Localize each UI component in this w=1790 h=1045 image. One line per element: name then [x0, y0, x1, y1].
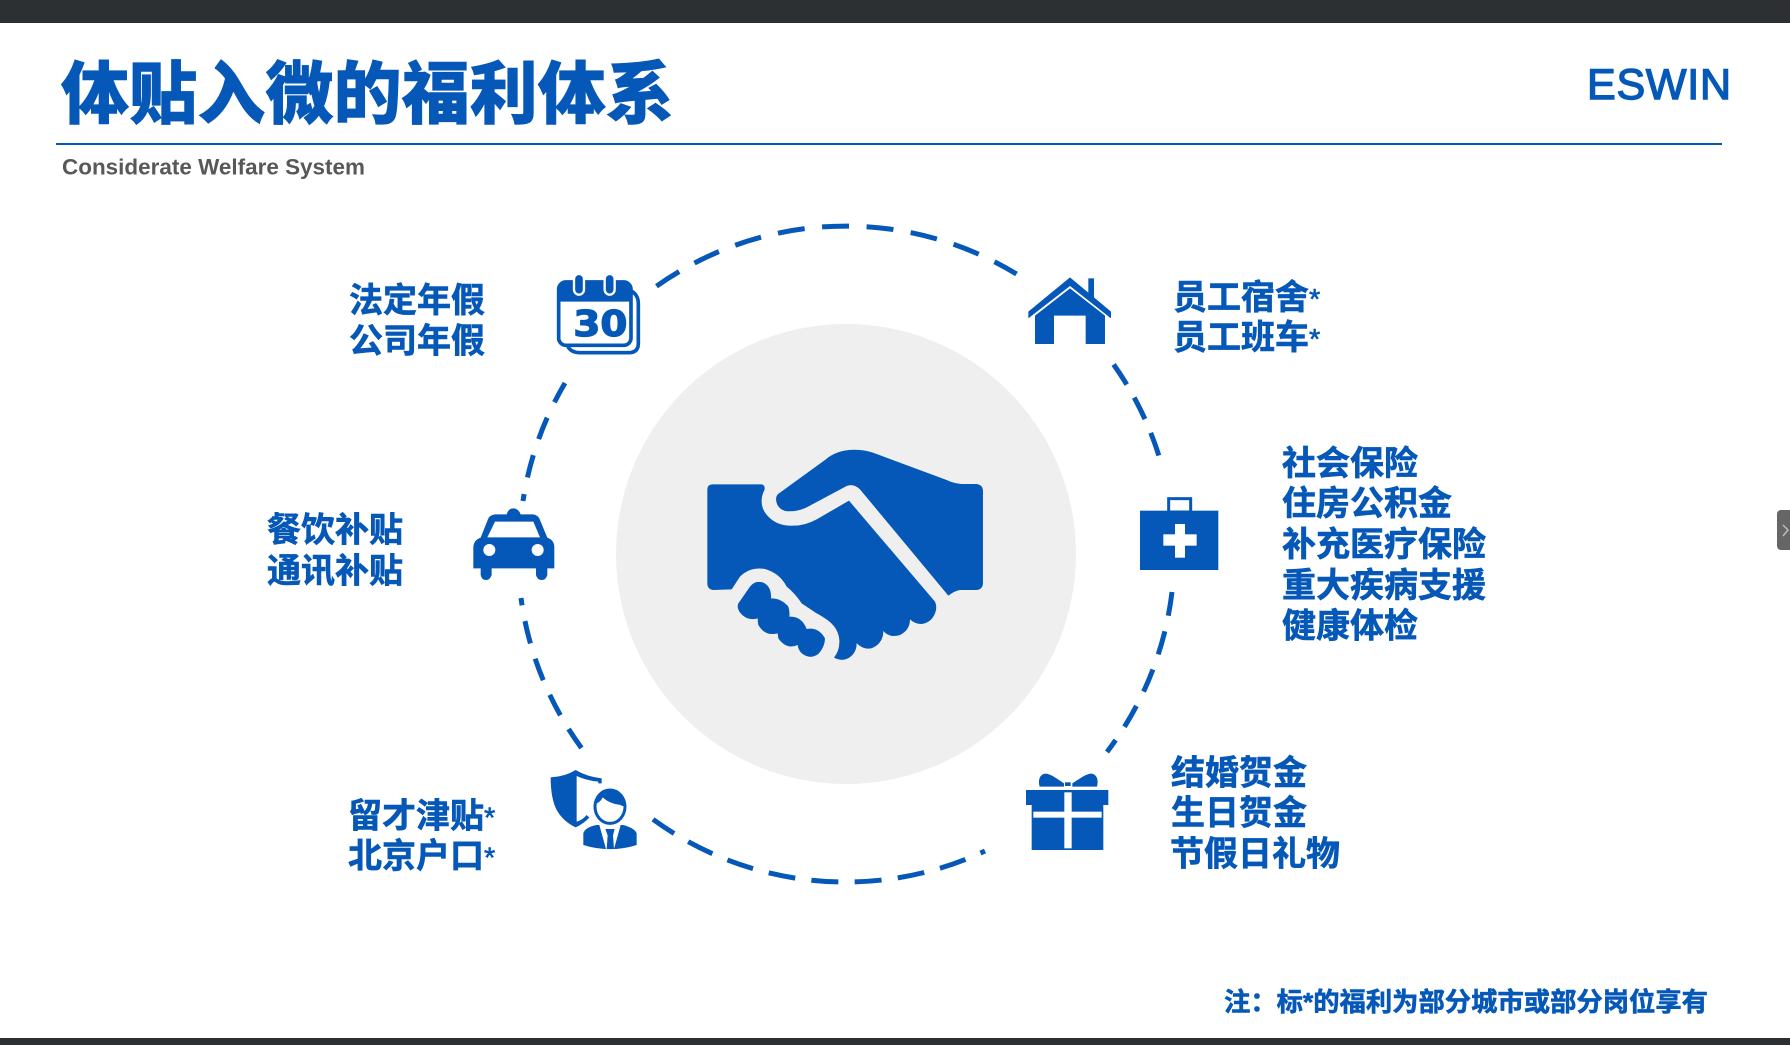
top bar — [0, 0, 1790, 23]
label: gifts: 节假日礼物 — [1170, 836, 1340, 874]
label: insurance and health: 补充医疗保险 — [1282, 526, 1486, 564]
side tab with chevron — [1777, 510, 1790, 550]
title: 体贴入微的福利体系 — [61, 57, 674, 133]
icon: taxi — [473, 508, 554, 580]
label: meal and communication allowances — [267, 512, 403, 590]
label: annual leave: 公司年假 — [349, 322, 485, 360]
footnote: 注：标*的福利为部分城市或部分岗位享有 — [1224, 987, 1708, 1017]
icon: medical kit — [1140, 499, 1218, 570]
label: insurance and health: 社会保险 — [1282, 445, 1418, 483]
logo: ESWIN: ESWIN — [1587, 61, 1731, 109]
label: gifts: 生日贺金 — [1171, 794, 1307, 832]
label: meal and communication allowances: 餐饮补贴 — [267, 512, 403, 550]
label: gifts: 结婚贺金 — [1171, 754, 1307, 792]
central grey circle — [616, 324, 1076, 784]
label: insurance and health: 住房公积金 — [1282, 485, 1452, 523]
subtitle: Considerate Welfare System — [62, 154, 365, 180]
label: insurance and health — [1282, 445, 1486, 646]
label: annual leave: 法定年假 — [349, 282, 485, 320]
icon: handshake — [707, 450, 983, 660]
label: talent allowance and hukou — [348, 798, 495, 876]
label: annual leave — [349, 282, 485, 360]
label: dormitory and shuttle — [1173, 279, 1320, 357]
bottom bar — [0, 1038, 1790, 1045]
icon: shield and person — [551, 770, 637, 849]
label: talent allowance and hukou: 留才津贴* — [348, 798, 495, 836]
label: dormitory and shuttle: 员工班车* — [1173, 319, 1320, 357]
label: talent allowance and hukou: 北京户口* — [348, 838, 495, 876]
label: insurance and health: 重大疾病支援 — [1282, 567, 1486, 605]
label: insurance and health: 健康体检 — [1282, 608, 1418, 646]
header rule — [56, 143, 1722, 145]
icon: house — [1028, 277, 1111, 344]
icon: calendar — [557, 274, 638, 353]
label: gifts — [1170, 754, 1340, 874]
icon: gift — [1026, 774, 1108, 850]
icon: calendar: 30 — [573, 304, 627, 345]
label: dormitory and shuttle: 员工宿舍* — [1173, 279, 1320, 317]
label: meal and communication allowances: 通讯补贴 — [267, 552, 403, 590]
dashed ring — [521, 226, 1172, 882]
